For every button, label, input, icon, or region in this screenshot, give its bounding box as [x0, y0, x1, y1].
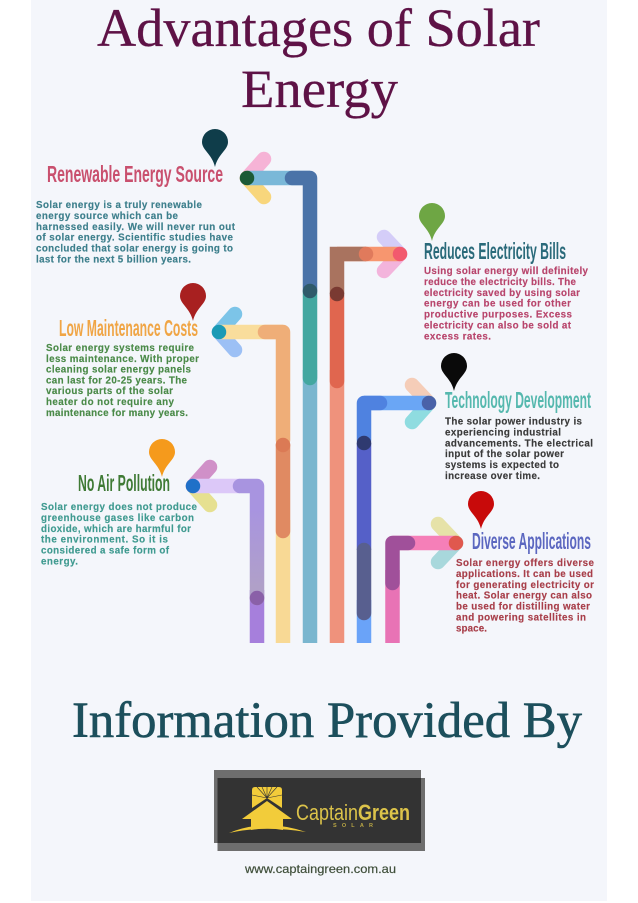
panel: low maintenance costs: [46, 283, 206, 419]
text block: [41, 502, 198, 568]
text block: productive purposes. Excess: [424, 310, 573, 321]
text block: energy can be used for other: [424, 299, 571, 310]
text block: reduce the electricity bills. The: [424, 277, 577, 288]
text block: greenhouse gases like carbon: [41, 513, 194, 524]
website url: www.captaingreen.com.au: [244, 862, 396, 876]
text block: last for the next 5 billion years.: [36, 254, 191, 266]
text block: advancements. The electrical: [445, 438, 593, 449]
arrow: diverse applications: [392, 524, 463, 643]
text block: concluded that solar energy is going to: [36, 244, 233, 255]
logo: captain green solar: [214, 770, 425, 851]
text block: the environment. So it is: [41, 535, 169, 546]
title: Energy: [241, 59, 398, 119]
text block: dioxide, which are harmful for: [41, 524, 191, 535]
text block: energy source which can be: [36, 211, 179, 222]
heading: No Air Pollution: [78, 470, 170, 496]
text block: cleaning solar energy panels: [46, 365, 192, 376]
text block: Using solar energy will definitely: [424, 266, 589, 277]
arrow chart: [186, 159, 463, 643]
logo subtitle: SOLAR: [333, 823, 373, 829]
text block: [445, 416, 593, 482]
logo wordmark: CaptainGreen: [296, 800, 410, 825]
text block: [46, 343, 199, 419]
text block: for generating electricity or: [456, 580, 594, 591]
text block: Solar energy is a truly renewable: [36, 200, 203, 211]
panel: reduces electricity bills: [419, 203, 589, 342]
text block: heat. Solar energy can also: [456, 591, 592, 602]
text block: [424, 266, 589, 342]
text block: space.: [456, 623, 487, 634]
text block: less maintenance. With proper: [46, 354, 199, 365]
arrow: technology development: [357, 385, 436, 643]
text block: energy.: [41, 556, 78, 568]
text block: applications. It can be used: [456, 569, 593, 580]
panel: diverse applications: [456, 491, 595, 634]
icon: red pin: [180, 283, 206, 321]
text block: considered a safe form of: [41, 546, 170, 557]
text block: electricity saved by using solar: [424, 288, 580, 299]
arrow: low maintenance costs: [212, 314, 290, 643]
text block: of solar energy. Scientific studies have: [36, 233, 234, 244]
text block: increase over time.: [445, 471, 540, 482]
arrow: no air pollution: [186, 467, 264, 643]
icon: black pin: [441, 353, 467, 391]
icon: green pin: [419, 203, 445, 241]
text block: [456, 558, 595, 634]
panel: technology development: [441, 353, 593, 482]
text block: harnessed easily. We will never run out: [36, 222, 236, 233]
text block: input of the solar power: [445, 449, 564, 460]
text block: Solar energy does not produce: [41, 502, 198, 513]
icon: orange pin: [149, 439, 175, 477]
icon: bright red pin: [468, 491, 494, 529]
arrow: reduces electricity bills: [330, 237, 407, 643]
text block: maintenance for many years.: [46, 408, 188, 419]
panel: no air pollution: [41, 439, 198, 568]
credit heading: Information Provided By: [72, 693, 582, 749]
panel: renewable energy source: [36, 129, 236, 266]
text block: be used for distilling water: [456, 602, 590, 613]
text block: excess rates.: [424, 331, 491, 342]
text block: systems is expected to: [445, 460, 559, 471]
heading: Renewable Energy Source: [47, 161, 223, 187]
text block: Solar energy systems require: [46, 343, 195, 354]
text block: heater do not require any: [46, 397, 175, 408]
icon: house with sun: [229, 787, 306, 833]
text block: [36, 200, 236, 266]
text block: can last for 20-25 years. The: [46, 375, 188, 386]
text block: and powering satellites in: [456, 612, 586, 624]
text block: electricity can also be sold at: [424, 320, 572, 332]
heading: Low Maintenance Costs: [59, 315, 198, 341]
icon: dark teal pin: [202, 129, 228, 167]
arrow: renewable energy source: [240, 159, 317, 643]
text block: The solar power industry is: [445, 416, 583, 428]
text block: various parts of the solar: [46, 386, 173, 397]
title: [97, 0, 540, 119]
text block: experiencing industrial: [445, 427, 561, 438]
text block: Solar energy offers diverse: [456, 558, 595, 569]
